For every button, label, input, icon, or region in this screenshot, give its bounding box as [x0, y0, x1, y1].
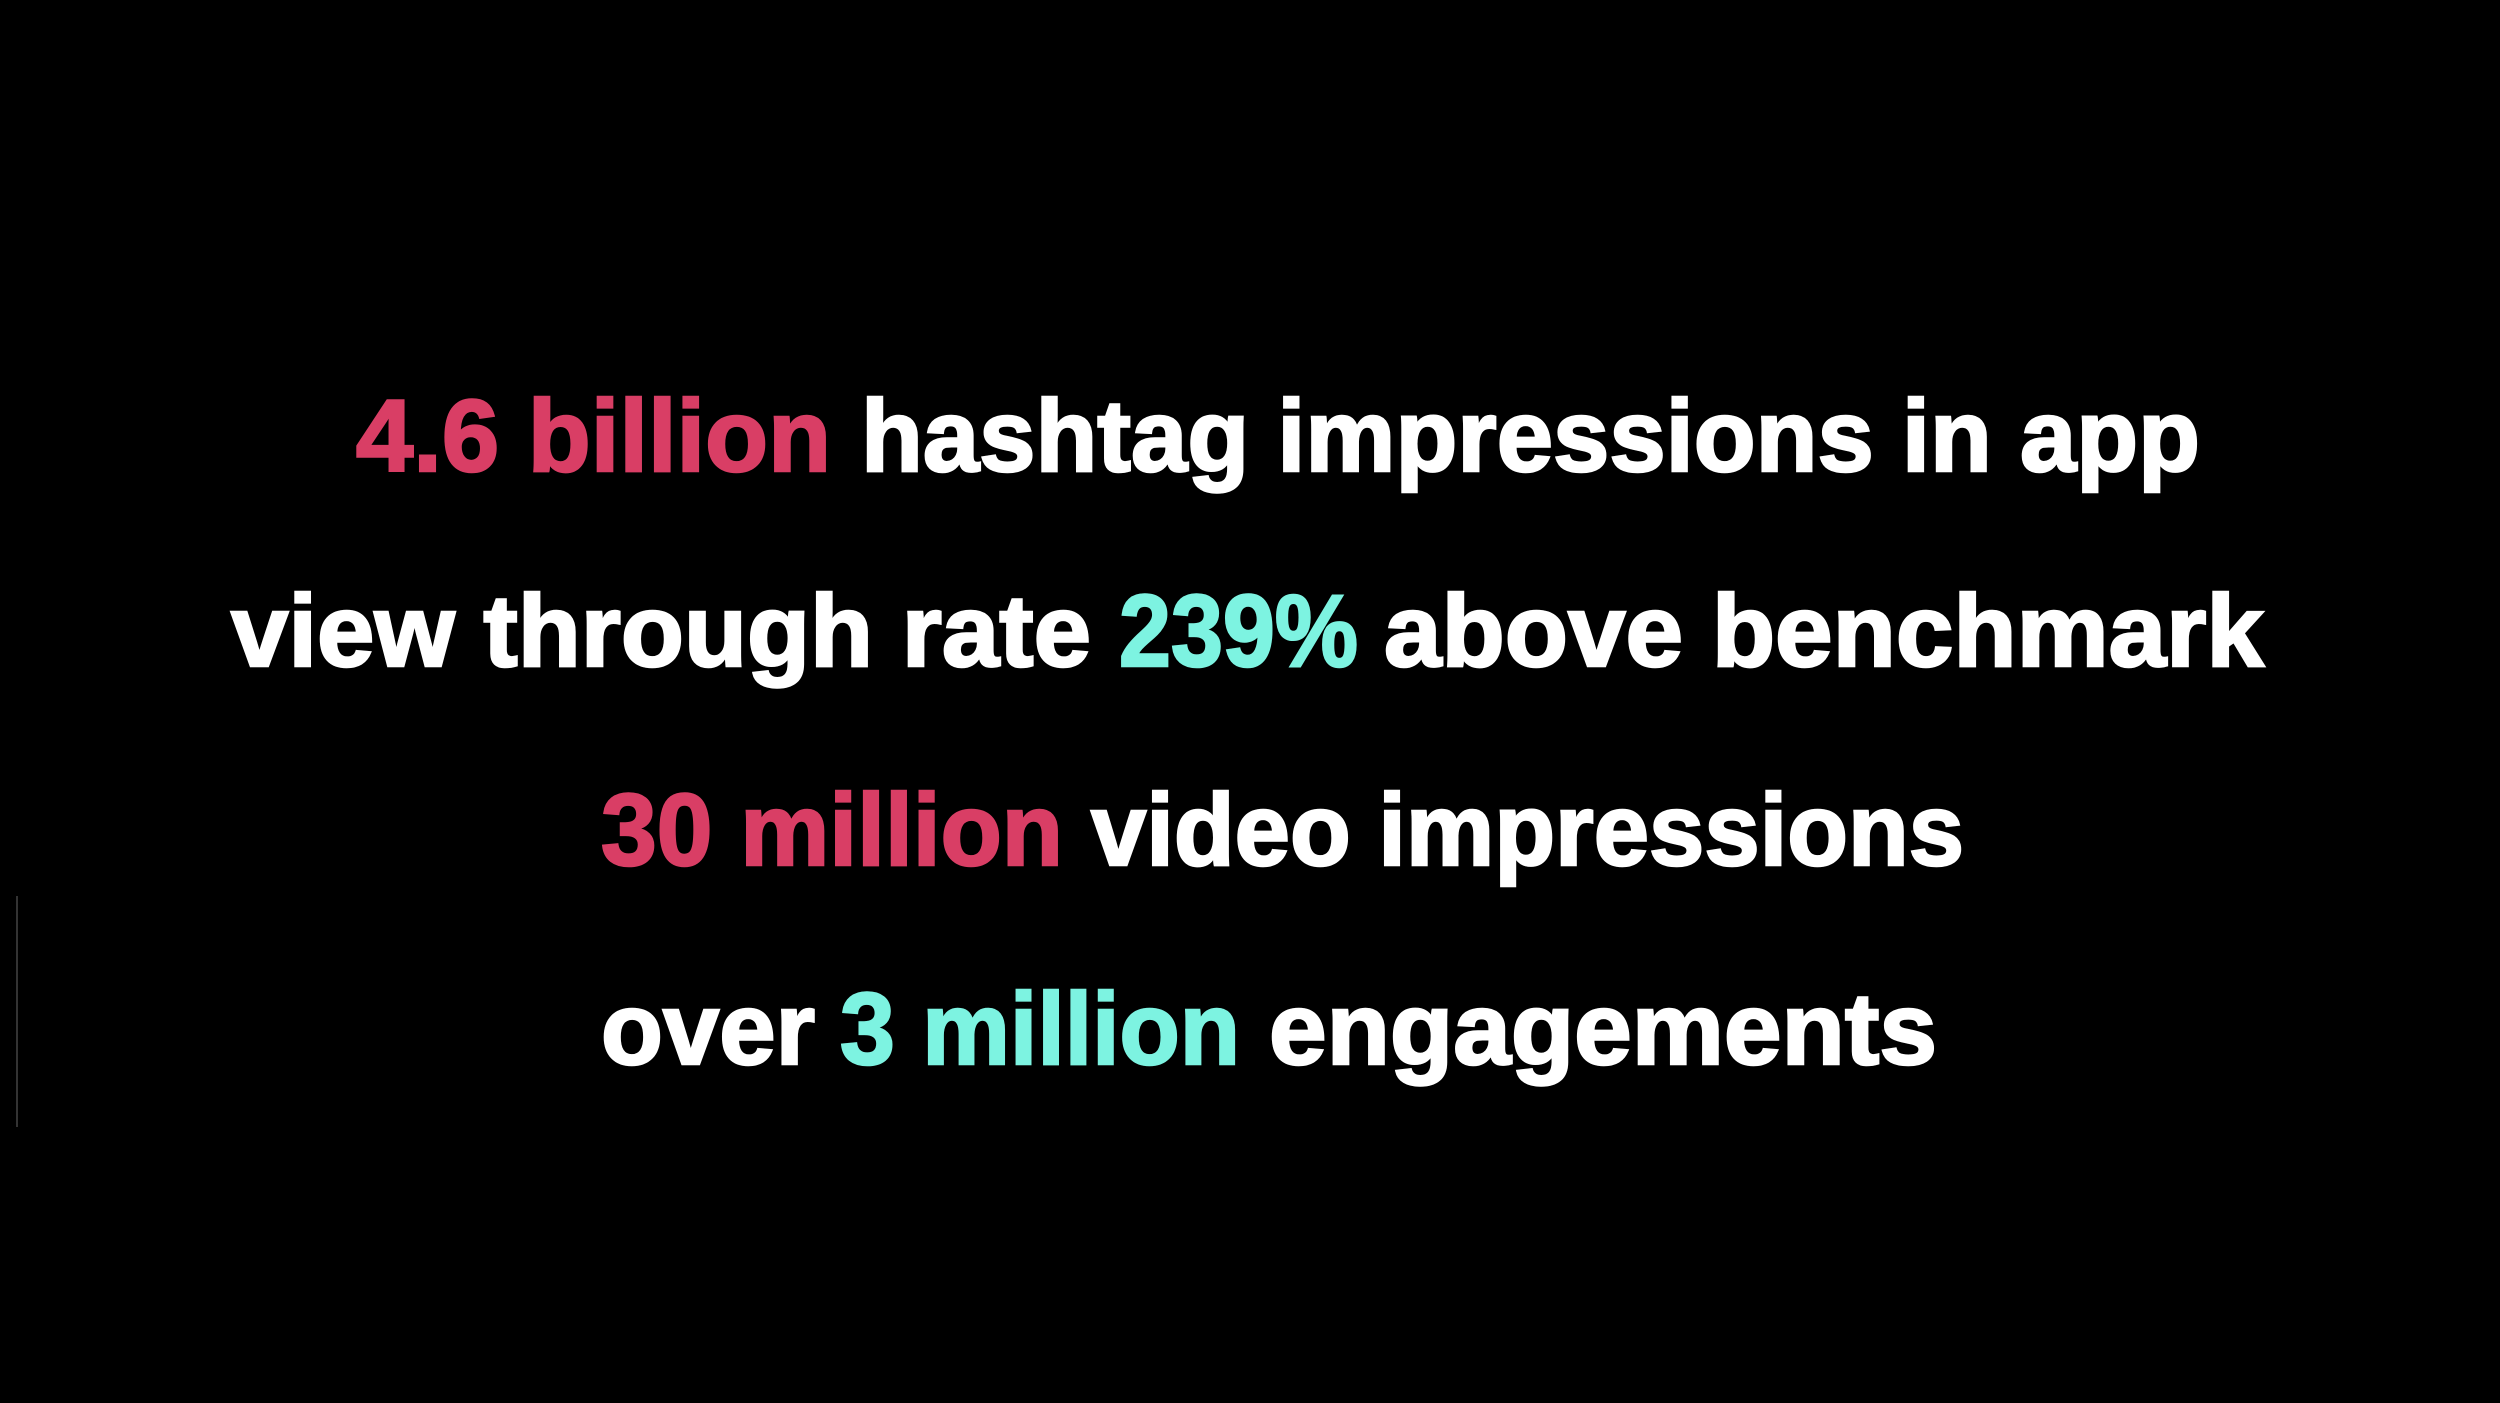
- stat line: hashtag impressions: [356, 379, 2200, 493]
- stat line: view through rate: [231, 574, 2264, 688]
- thin vertical line at left edge: [16, 896, 18, 1127]
- stat line: engagements: [601, 972, 1937, 1086]
- highlighted figure: 239%: 239%: [1119, 574, 1358, 688]
- text: above benchmark: above benchmark: [1384, 574, 2264, 688]
- text: view through rate: view through rate: [231, 574, 1091, 688]
- text: engagements: engagements: [1269, 972, 1937, 1086]
- highlighted figure: 3 million: 3 million: [840, 972, 1240, 1086]
- text: video impressions: video impressions: [1091, 773, 1964, 887]
- highlighted figure: 30 million: 30 million: [601, 773, 1063, 887]
- stat line: video impressions: [601, 773, 1964, 887]
- text: hashtag impressions in app: hashtag impressions in app: [861, 379, 2200, 493]
- text: over: over: [601, 972, 815, 1086]
- highlighted figure: 4.6 billion: 4.6 billion: [356, 379, 831, 493]
